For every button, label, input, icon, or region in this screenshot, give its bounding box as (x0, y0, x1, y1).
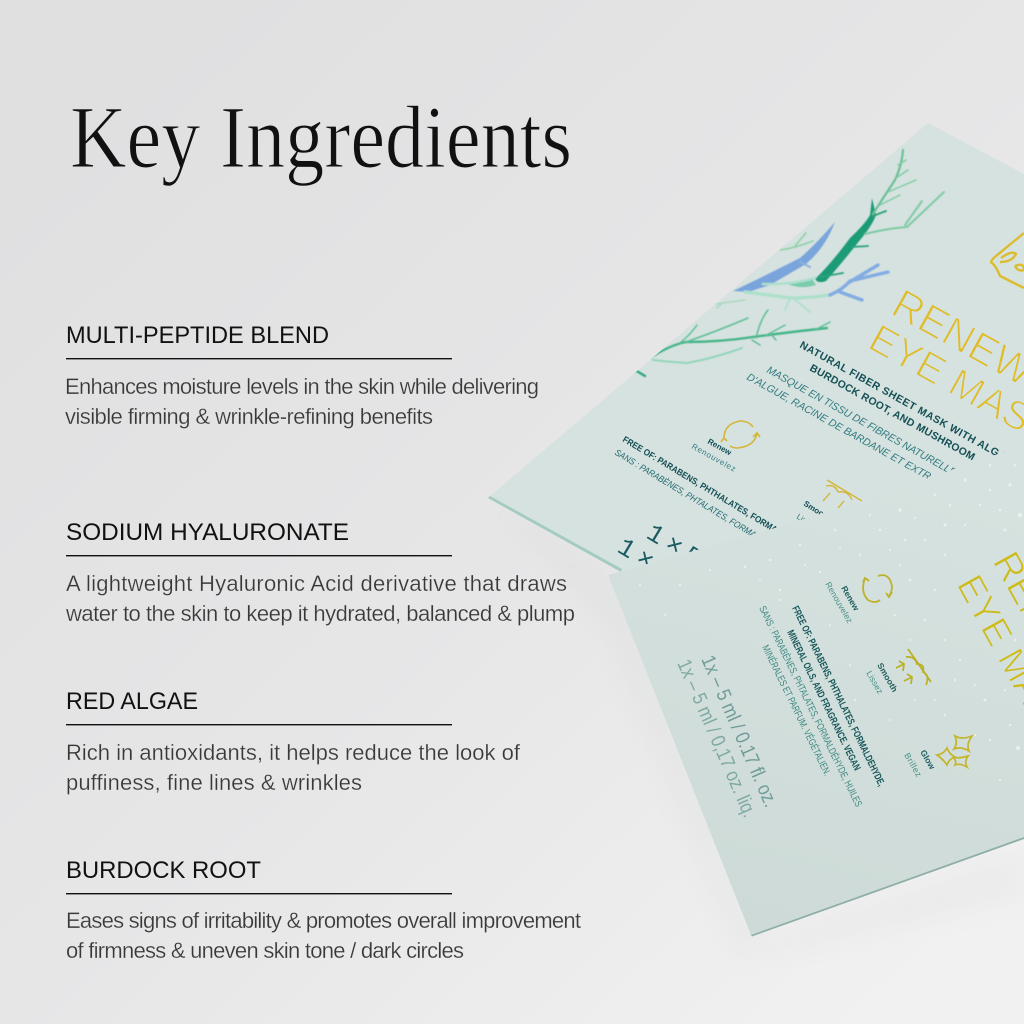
description: sodium hyaluronate: water to the skin to keep it hydrated, balanced & plump (65, 601, 575, 626)
back quantity text: 1×5 ml (612, 532, 738, 625)
back product description: D'ALGUE, RACINE DE BARDANE ET EXTRAIT (745, 371, 949, 491)
back free-of text: FREE OF: PARABENS, PHTHALATES, FORMALDEHYDE, (621, 434, 815, 556)
label: glow front: Brillez (902, 751, 924, 779)
label: smooth front: Smooth (875, 661, 900, 694)
description: multi-peptide blend (65, 374, 539, 429)
water droplets (639, 464, 1022, 781)
front free-of text: SANS : PARABÈNES, PHTALATES, FORMALDÉHYDE, HUILES (756, 604, 865, 809)
label: renew front: Renouvelez (823, 580, 855, 625)
back quantity text: 1×5 ml (641, 518, 767, 611)
heading: burdock root: BURDOCK ROOT (66, 857, 261, 884)
ingredient: multi-peptide blend (65, 322, 539, 429)
front sachet thickness edge (751, 837, 1024, 936)
front quantity text: 1x – 5 ml / 0,17 oz. liq. (672, 656, 760, 821)
front quantity text: 1x – 5 ml / 0.17 fl. oz. (696, 652, 782, 810)
description: red algae: Rich in antioxidants, it helps reduce the look of (66, 740, 521, 765)
icon: glow sparkles (937, 736, 972, 767)
icon: renew arrows back (721, 421, 760, 448)
ingredient: red algae (66, 688, 521, 795)
front product name (958, 552, 1024, 706)
back free-of text: SANS : PARABÈNES, PHTALATES, FORMALDÉHYDE, (613, 447, 793, 561)
label: smooth back: Lissez (795, 512, 819, 532)
heading: multi-peptide blend: MULTI-PEPTIDE BLEND (66, 322, 329, 349)
back product description (745, 339, 1018, 491)
description: sodium hyaluronate (65, 571, 575, 626)
front sachet body (608, 445, 1024, 935)
front free-of text: MINERAL OILS, AND FRAGRANCE. VEGAN (784, 628, 862, 773)
front free-of text: MINÉRALES ET PARFUM. VÉGÉTALIEN. (759, 643, 834, 778)
label: smooth front (864, 661, 900, 696)
description: burdock root (66, 908, 581, 963)
front sachet (608, 445, 1024, 936)
back sachet (488, 123, 1024, 572)
card shadows (500, 505, 1024, 960)
product photo: eye mask sachets (488, 123, 1024, 960)
heading: red algae: RED ALGAE (66, 688, 198, 715)
label: smooth front: Lissez (864, 669, 885, 696)
back product description: NATURAL FIBER SHEET MASK WITH ALGAE, (798, 339, 1018, 468)
front free-of text: FREE OF: PARABENS, PHTHALATES, FORMALDEHYDE, (789, 604, 886, 788)
icon: smooth back (823, 480, 862, 508)
description: burdock root: of firmness & uneven skin tone / dark circles (66, 938, 464, 963)
label: renew front: Renew (839, 584, 862, 613)
icon: renew arrows front (863, 575, 892, 602)
label: glow front: Glow (918, 748, 938, 771)
label: glow front (902, 748, 938, 779)
icon: smooth front (896, 649, 931, 685)
label: smooth back: Smooth (802, 499, 832, 523)
description: multi-peptide blend: visible firming & wrinkle-refining benefits (65, 404, 433, 429)
heading: sodium hyaluronate: SODIUM HYALURONATE (66, 519, 349, 546)
description: multi-peptide blend: Enhances moisture levels in the skin while delivering (65, 374, 539, 399)
back product description: BURDOCK ROOT, AND MUSHROOM (808, 362, 977, 463)
icon: logo badge gold (991, 233, 1024, 288)
description: sodium hyaluronate: A lightweight Hyaluronic Acid derivative that draws (66, 571, 567, 596)
description: red algae: puffiness, fine lines & wrinkles (66, 770, 362, 795)
illustration: watercolor coral (635, 150, 944, 376)
description: red algae (66, 740, 521, 795)
label: renew back: Renouvelez (690, 442, 737, 474)
back product description: MASQUE EN TISSU DE FIBRES NATURELLES (765, 364, 965, 482)
label: smooth back (795, 499, 832, 532)
ingredient: burdock root (66, 857, 581, 963)
back sachet body (488, 123, 1024, 571)
description: burdock root: Eases signs of irritability & promotes overall improvement (66, 908, 581, 933)
label: renew back: Renew (706, 437, 734, 458)
ingredient: sodium hyaluronate (65, 519, 575, 626)
back sachet thickness edge (488, 496, 622, 572)
title: Key Ingredients (70, 89, 572, 187)
